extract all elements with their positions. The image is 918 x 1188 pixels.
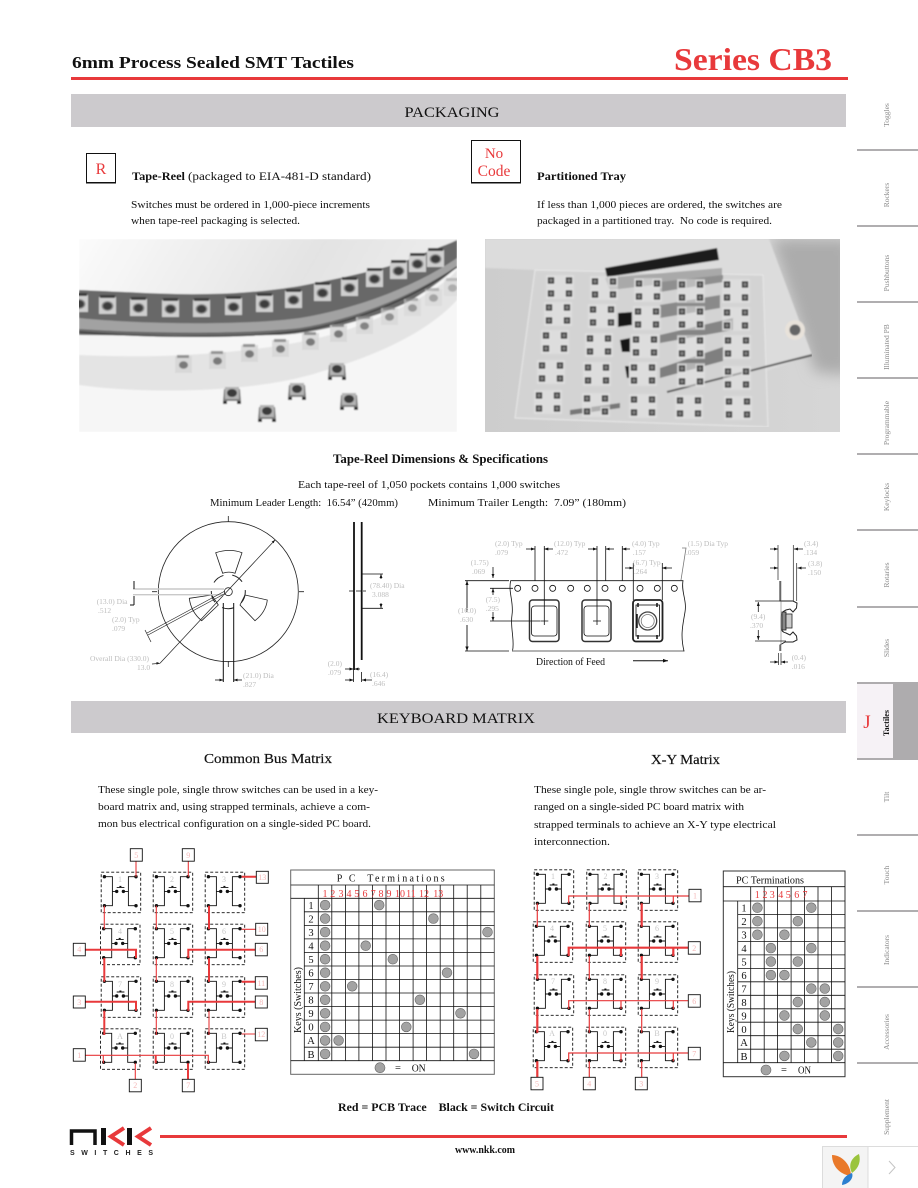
labels: x-y terminal numbers <box>535 892 697 1088</box>
text block: x-y description: interconnection. <box>534 836 610 848</box>
table: common bus terminations <box>291 870 494 1074</box>
labels: side section dimensions: (9.4) <box>751 612 766 621</box>
row labels: 5 <box>741 958 747 968</box>
table: x-y terminations <box>723 871 845 1077</box>
labels: x-y key names: 5 <box>603 924 607 933</box>
text block: partitioned tray: packaged in a partitioned tray. No code is required. <box>537 215 772 227</box>
code box: no code <box>471 140 521 184</box>
row labels: 9 <box>308 1009 314 1020</box>
widget: viewer corner button <box>822 1146 918 1188</box>
labels: carrier tape dimensions: .630 <box>460 615 473 624</box>
row labels: 8 <box>741 998 747 1009</box>
labels: common bus terminal numbers: 9 <box>186 851 190 860</box>
tab labels: Supplement <box>882 1098 891 1135</box>
legend text <box>395 1063 426 1074</box>
diagram: common bus switch matrix <box>73 849 268 1092</box>
text block: x-y description: These single pole, single throw switches can be ar- <box>534 784 766 796</box>
tab labels: Rockers <box>882 183 891 207</box>
row labels: 4 <box>741 944 747 955</box>
labels: carrier tape dimensions: (2.0) Typ <box>495 539 523 548</box>
labels: common bus key names: B <box>221 1032 227 1041</box>
column numbers: 7 <box>802 890 808 901</box>
row labels: 7 <box>308 982 314 993</box>
legend text: = <box>781 1065 787 1076</box>
labels: reel front dimensions: 13.0 <box>137 663 150 672</box>
column numbers: 2 <box>330 889 335 900</box>
labels: side section dimensions: .150 <box>808 568 821 577</box>
labels: side section dimensions: (0.4) <box>792 653 807 662</box>
column numbers <box>322 889 443 900</box>
text block: x-y description: strapped terminals to achieve an X-Y type electrical <box>534 819 776 831</box>
legend: trace colors: Red = PCB Trace Black = Switch Circuit <box>338 1102 554 1114</box>
header rule <box>71 77 848 80</box>
labels: common bus key names <box>117 875 227 1041</box>
diagram: carrier tape <box>465 546 686 651</box>
labels: reel side dimensions: 3.088 <box>372 590 389 599</box>
column numbers: 12 <box>419 889 429 900</box>
labels: x-y key names: B <box>654 1029 660 1038</box>
labels: x-y terminal numbers: 1 <box>693 892 697 900</box>
labels: common bus key names: 6 <box>222 927 226 936</box>
switches: common bus grid <box>100 872 245 1069</box>
tab labels: Slides <box>882 639 891 657</box>
arrow: feed direction <box>633 660 668 662</box>
row labels: 8 <box>308 996 314 1006</box>
icon: leaf logo <box>832 1154 860 1185</box>
labels: common bus terminal numbers: 13 <box>258 873 266 882</box>
tab labels <box>882 103 891 1135</box>
column numbers: 5 <box>354 889 359 900</box>
header: series name: Series CB3 <box>674 41 832 77</box>
row labels: B <box>740 1052 748 1063</box>
labels: x-y key names: 7 <box>551 977 555 986</box>
labels: common bus key names: 2 <box>170 875 174 884</box>
labels: reel side dimensions: .646 <box>372 679 385 688</box>
row labels: A <box>307 1036 315 1047</box>
text block: tape-reel: when tape-reel packaging is selected. <box>131 215 300 227</box>
labels: reel front dimensions: Overall Dia (330.0) <box>90 654 149 663</box>
row labels: 1 <box>308 901 314 912</box>
labels: carrier tape dimensions: .069 <box>472 567 485 576</box>
labels: side section dimensions <box>750 539 823 671</box>
tab labels: Toggles <box>882 103 891 127</box>
labels: carrier tape dimensions: (7.5) <box>486 595 501 604</box>
labels: reel front dimensions: (13.0) Dia <box>97 597 128 606</box>
labels: reel side dimensions: (78.40) Dia <box>370 581 405 590</box>
footer url: www.nkk.com <box>455 1145 516 1156</box>
section banner: packaging <box>71 94 846 127</box>
labels: carrier tape dimensions: (1.5) Dia Typ <box>688 539 728 548</box>
text block: common bus description <box>98 784 378 830</box>
code box: R: R <box>96 161 107 178</box>
labels: common bus terminal numbers: 3 <box>77 998 81 1007</box>
row labels: 6 <box>741 971 747 982</box>
labels: common bus terminal numbers: 12 <box>257 1030 265 1039</box>
labels: common bus terminal numbers: 1 <box>77 1051 81 1060</box>
tab labels: Accessories <box>882 1014 891 1050</box>
labels: carrier tape dimensions: .079 <box>495 548 508 557</box>
labels: x-y terminal numbers: 5 <box>535 1080 539 1088</box>
footer rule <box>160 1135 847 1138</box>
diagram: reel front view <box>130 516 304 682</box>
text block: reel specifications <box>210 479 626 509</box>
labels: reel side dimensions: (2.0) <box>328 659 343 668</box>
column numbers: 3 <box>770 890 775 901</box>
labels: common bus key names: 4 <box>118 927 122 936</box>
switches: x-y grid <box>533 870 678 1068</box>
labels: carrier tape dimensions: (6.7) Typ <box>633 558 661 567</box>
tab labels: Indicators <box>882 935 891 965</box>
labels: common bus key names: 9 <box>222 980 226 989</box>
column numbers: 13 <box>433 889 443 900</box>
text block: partitioned tray: Partitioned Tray <box>537 169 626 183</box>
tab: active tactiles <box>857 682 918 760</box>
text block: partitioned tray: If less than 1,000 pieces are ordered, the switches are <box>537 199 782 211</box>
logo: NKK Switches: SWITCHES <box>70 1150 153 1157</box>
labels: common bus key names: 1 <box>118 875 122 884</box>
text block: partitioned tray <box>537 169 782 227</box>
on dots <box>320 900 492 1073</box>
labels: carrier tape dimensions: .295 <box>486 604 499 613</box>
labels: x-y terminal numbers: 4 <box>587 1080 591 1088</box>
text block: tape-reel: (packaged to EIA-481-D standard) <box>188 169 371 183</box>
labels: carrier tape dimensions: (4.0) Typ <box>632 539 660 548</box>
labels: common bus terminal numbers: 2 <box>133 1081 137 1090</box>
table title: PC Terminations <box>736 875 804 886</box>
row labels: 9 <box>741 1012 747 1022</box>
labels: x-y key names: 9 <box>655 977 659 986</box>
labels: x-y key names: A <box>549 1029 555 1038</box>
labels: common bus key names: 0 <box>170 1032 174 1041</box>
text block: x-y description: ranged on a single-sided PC board matrix with <box>534 801 744 813</box>
diagram: tape side section <box>755 545 806 665</box>
labels: common bus terminal numbers: 5 <box>134 851 138 860</box>
labels: reel front dimensions: .512 <box>98 606 111 615</box>
row labels: 7 <box>741 984 747 996</box>
labels: x-y key names: 1 <box>551 872 555 881</box>
text block: reel specifications: Each tape-reel of 1,050 pockets contains 1,000 switches <box>298 479 560 491</box>
labels: carrier tape dimensions: (12.0) Typ <box>554 539 586 548</box>
labels: carrier tape dimensions: .157 <box>633 548 646 557</box>
labels: x-y key names: 4 <box>550 924 554 933</box>
row labels: 0 <box>741 1025 747 1036</box>
row labels: 2 <box>308 914 314 926</box>
labels: carrier tape dimensions: (16.0) <box>458 606 477 615</box>
labels: common bus terminal numbers: 6 <box>259 945 263 954</box>
code box: no code: Code <box>478 163 510 180</box>
tab labels: Rotaries <box>882 562 891 588</box>
photo: partitioned tray <box>485 239 850 432</box>
labels: common bus terminal numbers: 4 <box>77 945 81 954</box>
labels: common bus key names: 7 <box>118 980 122 989</box>
logo: NKK Switches <box>70 1128 153 1157</box>
column numbers: 6 <box>794 890 799 901</box>
text block: common bus description: These single pole, single throw switches can be used in a key- <box>98 784 378 796</box>
section banner: keyboard matrix: KEYBOARD MATRIX <box>377 711 535 727</box>
text block: common bus description: board matrix and, using strapped terminals, achieve a com- <box>98 801 370 813</box>
label: direction of feed: Direction of Feed <box>536 657 606 668</box>
labels: side section dimensions: (3.8) <box>808 559 823 568</box>
labels: x-y key names: 2 <box>604 872 608 881</box>
column numbers: 6 <box>362 889 368 900</box>
row labels: 6 <box>308 968 314 980</box>
icon: chevron <box>889 1161 895 1174</box>
labels: reel front dimensions: (21.0) Dia <box>243 671 274 680</box>
code box: R <box>86 154 116 184</box>
labels: common bus terminal numbers: 8 <box>259 998 263 1007</box>
code box: no code: No <box>485 146 503 162</box>
column numbers: 10 <box>395 889 405 900</box>
labels: carrier tape dimensions <box>458 539 728 624</box>
tab labels: Keylocks <box>882 483 891 511</box>
column numbers: 2 <box>762 890 768 901</box>
row labels: 4 <box>308 942 314 952</box>
column numbers: 5 <box>786 890 791 901</box>
section banner: keyboard matrix <box>71 701 846 733</box>
column numbers: 8 <box>378 889 384 900</box>
legend text: ON <box>798 1066 811 1076</box>
row labels <box>307 901 315 1061</box>
labels: x-y terminal numbers: 7 <box>692 1050 696 1058</box>
axis label: Keys (Switches) <box>293 967 304 1033</box>
header: product title: 6mm Process Sealed SMT Tactiles <box>72 53 354 72</box>
text block: tape-reel: Switches must be ordered in 1,000-piece increments <box>131 199 370 211</box>
column numbers: 1 <box>322 889 328 900</box>
axis label: Keys (Switches) <box>726 971 737 1033</box>
photo: tape reel with switches <box>71 239 461 432</box>
traces: common bus thin red <box>85 861 256 1079</box>
column numbers: 4 <box>346 889 352 900</box>
traces: x-y thick red <box>537 903 688 1077</box>
row labels <box>740 904 748 1063</box>
table title: P C Terminations <box>337 874 445 885</box>
row labels: A <box>740 1038 748 1049</box>
labels: x-y terminal numbers: 3 <box>639 1080 643 1088</box>
labels: carrier tape dimensions: .264 <box>634 567 647 576</box>
labels: common bus terminal numbers: 11 <box>257 979 265 988</box>
labels: x-y terminal numbers: 6 <box>692 997 696 1006</box>
diagram: reel side view <box>345 522 383 682</box>
labels: carrier tape dimensions: (1.75) <box>471 558 489 567</box>
labels: reel side dimensions: .079 <box>328 668 341 677</box>
labels: side section dimensions: .370 <box>750 621 763 630</box>
row labels: 2 <box>741 917 747 928</box>
text block: common bus description: mon bus electrical configuration on a single-sided PC board. <box>98 818 371 830</box>
heading: x-y matrix: X-Y Matrix <box>651 753 720 768</box>
labels: x-y key names: 8 <box>603 977 607 986</box>
labels: carrier tape dimensions: .472 <box>555 548 568 557</box>
terminals: x-y <box>531 889 701 1090</box>
labels: x-y key names: 0 <box>603 1029 607 1038</box>
column numbers: 1 <box>755 890 760 901</box>
tab labels: Pushbuttons <box>882 255 891 291</box>
labels: x-y key names <box>549 872 660 1038</box>
tab labels: Touch <box>882 865 891 884</box>
labels: common bus terminal numbers: 7 <box>186 1081 190 1090</box>
labels: x-y key names: 3 <box>655 872 659 881</box>
heading: tape-reel dimensions: Tape-Reel Dimensions & Specifications <box>333 452 548 466</box>
text block: reel specifications: Minimum Leader Length: 16.54” (420mm) <box>210 497 398 509</box>
labels: x-y terminal numbers: 2 <box>692 944 696 953</box>
column numbers <box>755 890 808 901</box>
traces: x-y thin red <box>537 896 689 1077</box>
labels: side section dimensions: (3.4) <box>804 539 819 548</box>
tab: active tactiles: Tactiles <box>882 710 891 736</box>
traces: common bus thick red <box>85 877 256 1079</box>
labels: common bus key names: 5 <box>170 927 174 936</box>
row labels: 3 <box>308 928 314 939</box>
legend text: = <box>395 1063 401 1074</box>
section banner: packaging: PACKAGING <box>404 105 500 121</box>
row labels: B <box>307 1050 315 1061</box>
column numbers: 11 <box>406 889 416 900</box>
tab: active tactiles: J <box>863 712 871 733</box>
labels: side section dimensions: .134 <box>804 548 817 557</box>
row labels: 0 <box>308 1022 314 1034</box>
on dots <box>752 903 843 1075</box>
labels: reel front dimensions: .827 <box>243 680 256 689</box>
tab labels: Illuminated PB <box>882 324 891 370</box>
labels: reel side dimensions <box>328 581 405 688</box>
labels: common bus terminal numbers: 10 <box>258 925 266 934</box>
row labels: 5 <box>308 955 314 966</box>
labels: reel front dimensions <box>90 597 274 689</box>
row labels: 3 <box>741 930 747 942</box>
column numbers: 4 <box>778 890 783 901</box>
labels: reel front dimensions: (2.0) Typ <box>112 615 140 624</box>
tab labels: Tilt <box>882 791 891 802</box>
terminals: common bus <box>73 849 268 1092</box>
labels: common bus key names: 3 <box>222 875 226 884</box>
labels: common bus key names: A <box>117 1032 123 1041</box>
labels: reel side dimensions: (16.4) <box>370 670 389 679</box>
labels: x-y key names: 6 <box>655 924 659 933</box>
labels: common bus terminal numbers <box>77 851 266 1090</box>
column numbers: 3 <box>338 889 344 900</box>
text block: tape-reel <box>131 169 371 227</box>
labels: reel front dimensions: .079 <box>112 624 125 633</box>
tab labels: Programmable <box>882 400 891 445</box>
heading: common bus matrix: Common Bus Matrix <box>204 752 332 767</box>
labels: carrier tape dimensions: .059 <box>686 548 699 557</box>
labels: side section dimensions: .016 <box>792 662 805 671</box>
text block: reel specifications: Minimum Trailer Length: 7.09” (180mm) <box>428 497 626 509</box>
labels: common bus key names: 8 <box>170 980 174 989</box>
sidebar: category tabs <box>857 103 918 1135</box>
text block: tape-reel: Tape-Reel <box>132 169 186 183</box>
column numbers: 9 <box>386 889 392 900</box>
text block: x-y description <box>534 784 776 848</box>
column numbers: 7 <box>371 889 376 900</box>
row labels: 1 <box>741 904 747 914</box>
diagram: x-y switch matrix <box>531 870 701 1090</box>
legend text <box>781 1065 811 1076</box>
legend text: ON <box>412 1064 426 1074</box>
